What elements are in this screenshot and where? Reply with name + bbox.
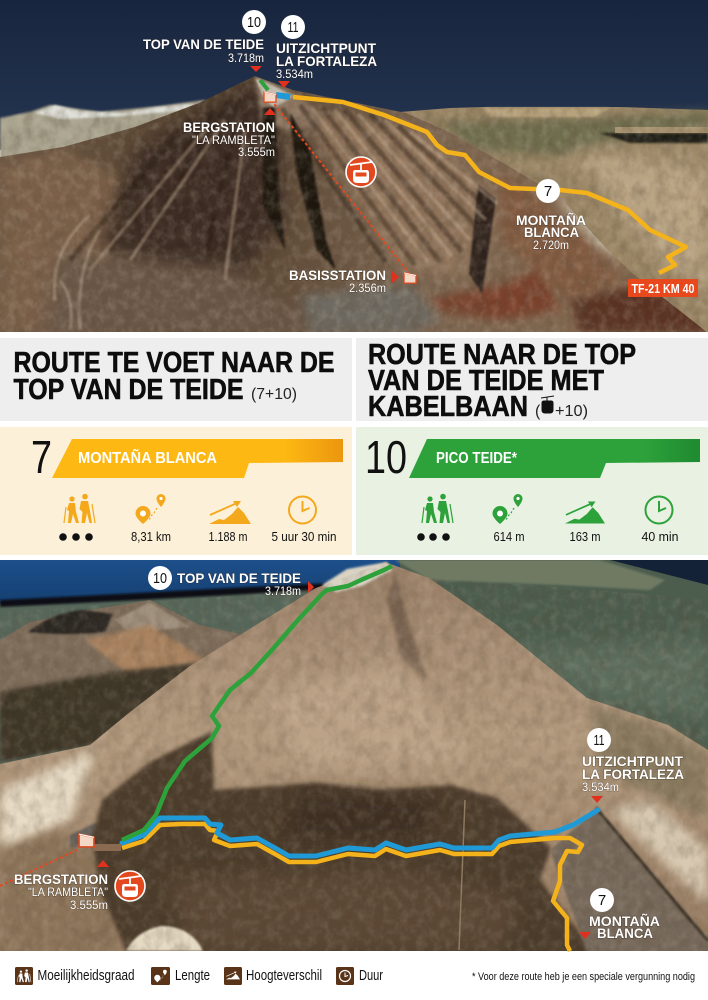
panel: heading walking route: [0, 338, 352, 421]
label: bergstation: 3.555m: [238, 147, 275, 159]
panel: heading walking route: (7+10): [251, 386, 297, 403]
panel: heading cable car route: +10): [555, 403, 588, 420]
icon: base station: [404, 273, 416, 283]
label: TF-21 km 40: [628, 279, 698, 297]
label: montana blanca: 7: [544, 183, 552, 200]
label: uitzichtpunt bottom: [582, 728, 684, 803]
label: top van de teide: 10: [247, 14, 261, 31]
banner Montana Blanca: [52, 439, 343, 478]
legend item: elevation: [224, 967, 322, 985]
banner Montana Blanca: MONTAÑA BLANCA: [78, 449, 217, 467]
panel: top aerial map: [0, 0, 708, 340]
label: uitzichtpunt la fortaleza: LA FORTALEZA: [276, 53, 377, 69]
difficulty dots: [59, 533, 93, 541]
route: bottom map blue trail: [122, 810, 598, 856]
summit and snow patches: [0, 562, 470, 951]
value: duration: 5 uur 30 min: [272, 529, 336, 544]
left coast: [0, 100, 205, 165]
legend: [15, 967, 383, 985]
panel: heading cable car route: KABELBAAN: [368, 391, 528, 423]
label: bergstation: [183, 108, 276, 159]
label: montana blanca: BLANCA: [524, 224, 579, 240]
right plateau: [400, 107, 708, 333]
label: bergstation bottom: "LA RAMBLETA": [28, 887, 108, 899]
label: top van de teide bottom: [148, 566, 314, 598]
icon: difficulty: [64, 494, 95, 523]
label: montana blanca: 2.720m: [533, 240, 569, 252]
value: length: 614 m: [494, 529, 524, 544]
crater mountain: [0, 600, 244, 762]
terrain noise: [0, 70, 708, 333]
banner Pico Teide: [409, 439, 700, 478]
sky and sea: [0, 560, 400, 604]
panel: stats Pico Teide: [356, 427, 708, 555]
legend item: duration: [336, 967, 383, 985]
label: basisstation: BASISSTATION: [289, 267, 386, 283]
label: uitzichtpunt la fortaleza: 3.534m: [276, 69, 313, 81]
icon: duration: [289, 496, 316, 524]
dark lava field: [92, 731, 600, 960]
legend item: length: Lengte: [175, 967, 210, 984]
label: basisstation: [289, 267, 399, 295]
label: top van de teide bottom: 10: [153, 570, 167, 587]
label: montana blanca bottom: [579, 888, 660, 941]
panel: heading cable car route: (: [535, 403, 541, 420]
banner Pico Teide: PICO TEIDE*: [436, 450, 518, 467]
background plateau: [0, 560, 708, 764]
route number 10: 10: [365, 431, 407, 483]
label: uitzichtpunt bottom: LA FORTALEZA: [582, 766, 684, 782]
label: top van de teide: [143, 10, 266, 72]
value: length: 8,31 km: [131, 529, 171, 544]
label: TF-21 km 40: TF-21 KM 40: [632, 282, 695, 296]
label: uitzichtpunt la fortaleza: UITZICHTPUNT: [276, 40, 376, 56]
heading text walking route: ROUTE TE VOET NAAR DE: [14, 347, 334, 379]
value: elevation: 1.188 m: [208, 529, 248, 544]
label: uitzichtpunt la fortaleza: [276, 15, 377, 88]
icon: cable car: [346, 157, 376, 187]
difficulty dots: [417, 533, 450, 541]
label: top van de teide: 3.718m: [228, 53, 264, 65]
legend item: elevation: Hoogteverschil: [246, 967, 322, 984]
icon: mountain station: [264, 92, 276, 102]
label: top van de teide bottom: TOP VAN DE TEIDE: [177, 570, 301, 586]
label: montana blanca: MONTAÑA: [516, 211, 586, 228]
icon: cable car bottom: [115, 871, 145, 901]
panel: heading walking route: TOP VAN DE TEIDE: [14, 374, 244, 406]
label: montana blanca bottom: BLANCA: [597, 925, 653, 941]
label: uitzichtpunt bottom: UITZICHTPUNT: [582, 753, 683, 769]
panel: heading cable car route: [356, 338, 708, 423]
label: bergstation bottom: 3.555m: [70, 900, 108, 912]
cable car line bottom: [0, 849, 79, 886]
icon: length: [136, 494, 166, 524]
label: bergstation: BERGSTATION: [183, 119, 275, 135]
right slope: [550, 705, 708, 960]
main cone: [0, 562, 708, 951]
icon: elevation: [209, 501, 251, 524]
label: basisstation: 2.356m: [349, 283, 386, 295]
panel: stats Montana Blanca: [0, 427, 352, 555]
route: top map yellow trail: [293, 97, 686, 273]
panel: heading cable car route: VAN DE TEIDE MET: [368, 365, 605, 397]
label: montana blanca bottom: 7: [598, 892, 606, 909]
label: uitzichtpunt bottom: 11: [594, 732, 604, 749]
icon: length: [492, 494, 522, 524]
route: bottom map green trail: [122, 566, 392, 840]
panel: bottom aerial map: [0, 560, 708, 960]
label: bergstation bottom: BERGSTATION: [14, 871, 108, 887]
label: bergstation bottom: [14, 860, 109, 912]
icon: mountain station bottom: [79, 834, 121, 851]
label: montana blanca: [516, 179, 586, 252]
terrain noise: [0, 560, 708, 951]
legend item: difficulty: [15, 967, 134, 985]
route number 7: 7: [31, 431, 52, 483]
icon: difficulty: [422, 494, 453, 523]
label: montana blanca bottom: MONTAÑA: [589, 912, 660, 929]
sea background: [0, 0, 708, 150]
value: duration: 40 min: [642, 529, 678, 544]
route: top map green trail: [260, 80, 268, 90]
label: uitzichtpunt la fortaleza: 11: [288, 19, 298, 36]
label: top van de teide: TOP VAN DE TEIDE: [143, 36, 264, 52]
icon: duration: [646, 496, 672, 524]
legend item: duration: Duur: [359, 967, 383, 984]
label: bergstation: "LA RAMBLETA": [192, 135, 275, 147]
heading text cable car route: ROUTE NAAR DE TOP: [368, 339, 636, 371]
icon: elevation: [565, 502, 605, 523]
label: top van de teide bottom: 3.718m: [265, 586, 301, 598]
legend item: length: [151, 967, 210, 985]
mountain body: [0, 70, 708, 340]
legend item: difficulty: Moeilijkheidsgraad: [38, 967, 134, 984]
route: top map blue trail: [276, 95, 290, 97]
label: uitzichtpunt bottom: 3.534m: [582, 782, 619, 794]
value: elevation: 163 m: [570, 529, 600, 544]
cable car line: [271, 100, 409, 273]
route: bottom map yellow trail: [122, 824, 582, 951]
